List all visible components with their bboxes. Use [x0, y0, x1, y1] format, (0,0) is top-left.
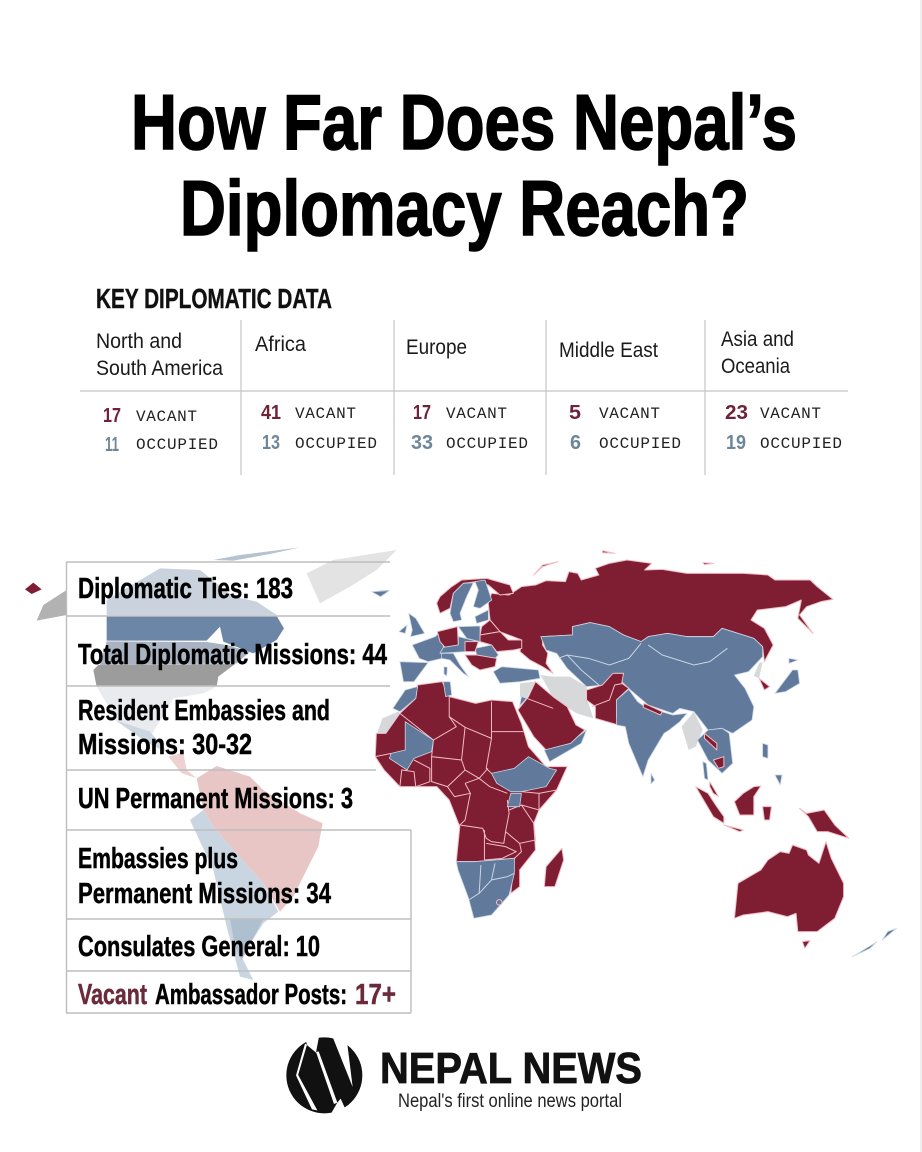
title: Diplomacy Reach?	[180, 164, 749, 252]
stat: total diplomatic missions: Total Diplomatic Missions: 44	[78, 639, 387, 671]
map: Europe, Africa, Asia and Oceania	[372, 551, 896, 957]
column: Middle East: OCCUPIED	[599, 435, 681, 453]
Mali and neighbours	[389, 722, 433, 770]
stat: vacant ambassador posts	[78, 979, 396, 1011]
column: Middle East: 6	[570, 432, 581, 454]
column: Africa: Africa	[255, 333, 306, 356]
title	[131, 78, 797, 252]
stat: vacant ambassador posts: Ambassador Posts:	[155, 979, 347, 1011]
Japan and Philippines	[763, 658, 800, 785]
column: Africa: 41	[261, 402, 281, 424]
column: Africa	[255, 333, 377, 454]
logo: Nepal News	[286, 1035, 642, 1115]
New Zealand	[852, 928, 896, 957]
column: Africa: VACANT	[295, 405, 356, 423]
map: Americas, faded behind the stats panel	[25, 547, 397, 980]
column: Europe: VACANT	[446, 405, 507, 423]
Belarus, Ukraine and the Balkans	[465, 620, 522, 670]
column: Europe	[406, 336, 528, 454]
Middle East grey states	[520, 675, 593, 718]
Sri Lanka	[651, 773, 655, 784]
column: Asia and Oceania: 23	[725, 402, 748, 424]
column: Middle East	[559, 339, 681, 454]
Southern Africa	[456, 858, 514, 918]
column: Africa: OCCUPIED	[295, 435, 377, 453]
Australia	[734, 842, 844, 948]
Germany	[437, 627, 458, 647]
table heading: KEY DIPLOMATIC DATA	[96, 283, 332, 314]
stat: embassies plus permanent missions: Permanent Missions: 34	[78, 878, 331, 910]
stats panel	[66, 562, 411, 1013]
column: Middle East: VACANT	[599, 405, 660, 423]
stat: resident embassies and missions: Missions: 30-32	[78, 729, 252, 761]
Afghanistan and Pakistan	[587, 673, 629, 725]
Turkey	[493, 667, 540, 683]
Ethiopia and South Sudan	[491, 757, 557, 807]
column: Africa: 13	[262, 432, 280, 454]
stat: vacant ambassador posts: Vacant	[78, 979, 147, 1011]
stat: embassies plus permanent missions: Embassies plus	[78, 843, 238, 875]
column: North and South America: OCCUPIED	[136, 436, 218, 454]
key diplomatic data table	[80, 283, 848, 475]
Arctic islands	[534, 551, 713, 575]
Russia	[488, 560, 833, 673]
stat: embassies plus permanent missions	[78, 843, 331, 910]
column: Europe: 17	[413, 402, 431, 424]
column: Asia and Oceania: Oceania	[721, 355, 790, 378]
stat: consulates general: Consulates General: 10	[78, 931, 320, 963]
India	[616, 689, 687, 777]
Nepal	[643, 703, 662, 715]
column: North and South America: VACANT	[136, 408, 197, 426]
column: North and South America: South America	[96, 357, 223, 380]
Morocco and Western Sahara	[393, 682, 452, 712]
column: Asia and Oceania: Asia and	[721, 328, 794, 351]
column: Asia and Oceania	[721, 328, 842, 454]
Indonesia, Malaysia and New Guinea	[696, 782, 849, 838]
icon: Nepal News emblem	[286, 1035, 362, 1115]
column: Asia and Oceania: VACANT	[760, 405, 821, 423]
column: Middle East: 5	[569, 402, 581, 424]
column: North and South America	[96, 330, 223, 456]
tagline: Nepal's first online news portal	[398, 1091, 622, 1112]
column: North and South America: North and	[96, 330, 182, 353]
Poland, Austria, Hungary, Romania and Italy	[440, 626, 498, 677]
column: North and South America: 11	[105, 434, 119, 456]
wordmark: NEPAL NEWS	[380, 1044, 642, 1093]
Western Europe	[372, 591, 444, 682]
stat: vacant ambassador posts: 17+	[355, 979, 396, 1011]
stat: UN permanent missions: UN Permanent Missions: 3	[78, 783, 353, 815]
column: Asia and Oceania: OCCUPIED	[760, 435, 842, 453]
Africa	[375, 682, 567, 893]
column: North and South America: 17	[103, 405, 121, 427]
column: Asia and Oceania: 19	[726, 432, 746, 454]
column: Europe: OCCUPIED	[446, 435, 528, 453]
stat: diplomatic ties: Diplomatic Ties: 183	[78, 573, 293, 605]
stat: resident embassies and missions	[78, 695, 330, 761]
Norway	[437, 578, 513, 613]
Europe detail: Scandinavia, Central and Eastern Europe, Turkey	[437, 578, 540, 683]
Kazakhstan, Central Asia, China and Mongolia	[541, 623, 763, 733]
Arabian Peninsula	[518, 682, 585, 750]
Sweden, Finland and the Baltics	[450, 580, 492, 623]
stat: resident embassies and missions: Resident Embassies and	[78, 695, 330, 727]
Madagascar	[544, 848, 564, 887]
column: Europe: Europe	[406, 336, 467, 359]
column: Europe: 33	[411, 432, 433, 454]
Southeast Asia	[682, 662, 763, 750]
column: Middle East: Middle East	[559, 339, 658, 362]
